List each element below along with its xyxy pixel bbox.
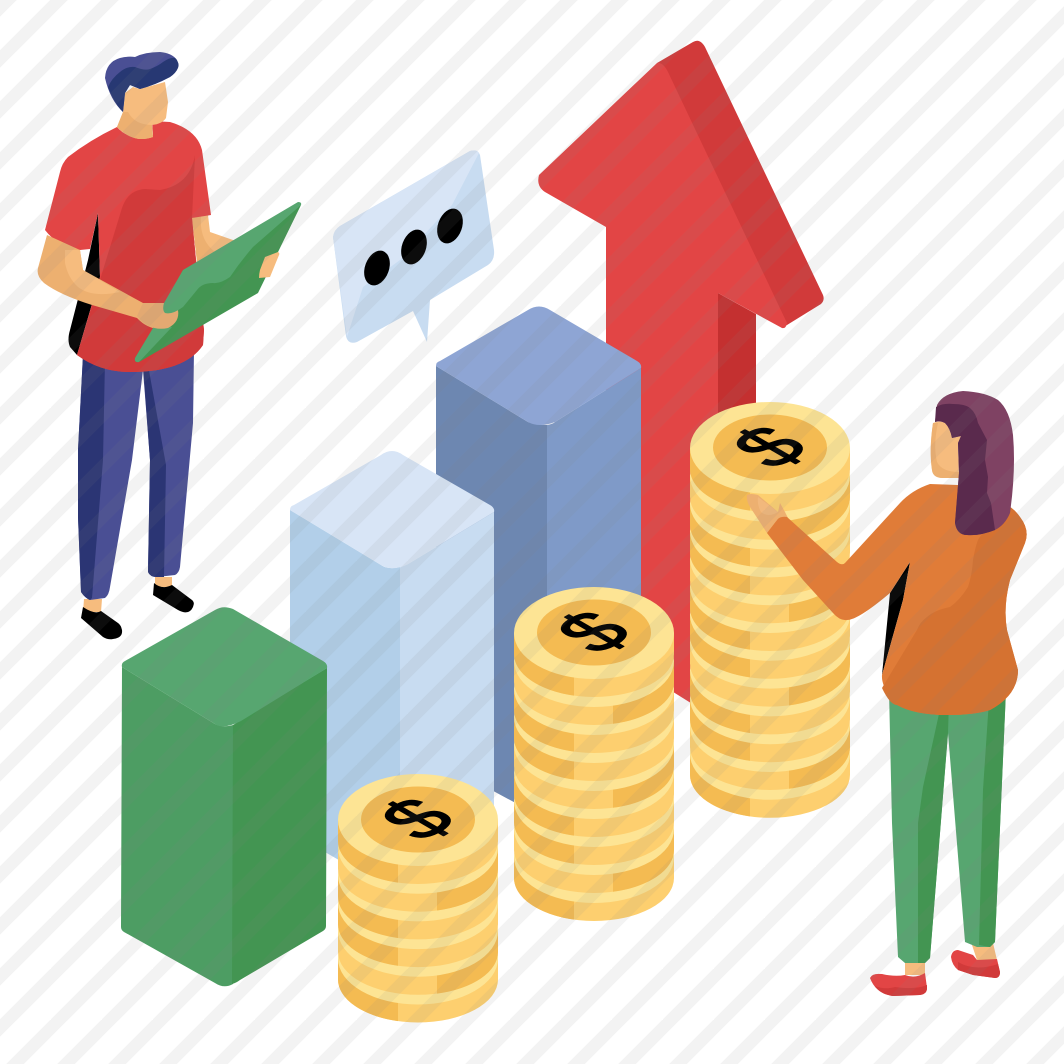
man: shirt <box>45 121 211 372</box>
man: black gap <box>68 213 100 355</box>
woman: head and hair <box>931 391 1014 535</box>
coin stack medium <box>514 587 674 921</box>
man: head <box>105 52 179 139</box>
red upward arrow <box>538 41 824 720</box>
dollar sign: $ <box>536 599 650 664</box>
periwinkle bar <box>436 306 641 820</box>
dollar sign: $ <box>712 414 826 479</box>
dollar sign: $ <box>360 786 474 851</box>
man: near arm <box>38 235 178 329</box>
man: far arm <box>192 215 250 262</box>
tablet <box>135 202 301 362</box>
woman: black gap <box>882 562 910 675</box>
typing dots <box>360 205 467 289</box>
woman <box>747 391 1027 996</box>
speech bubble <box>333 150 494 343</box>
woman: hand <box>747 494 788 533</box>
coin stack tall <box>690 402 850 818</box>
coin stack short <box>338 774 498 1022</box>
green bar <box>121 607 327 986</box>
woman: sweater <box>767 484 1027 715</box>
woman: legs <box>870 690 1006 996</box>
light blue bar <box>290 451 494 895</box>
man with tablet <box>38 52 301 639</box>
man: legs <box>78 350 194 639</box>
